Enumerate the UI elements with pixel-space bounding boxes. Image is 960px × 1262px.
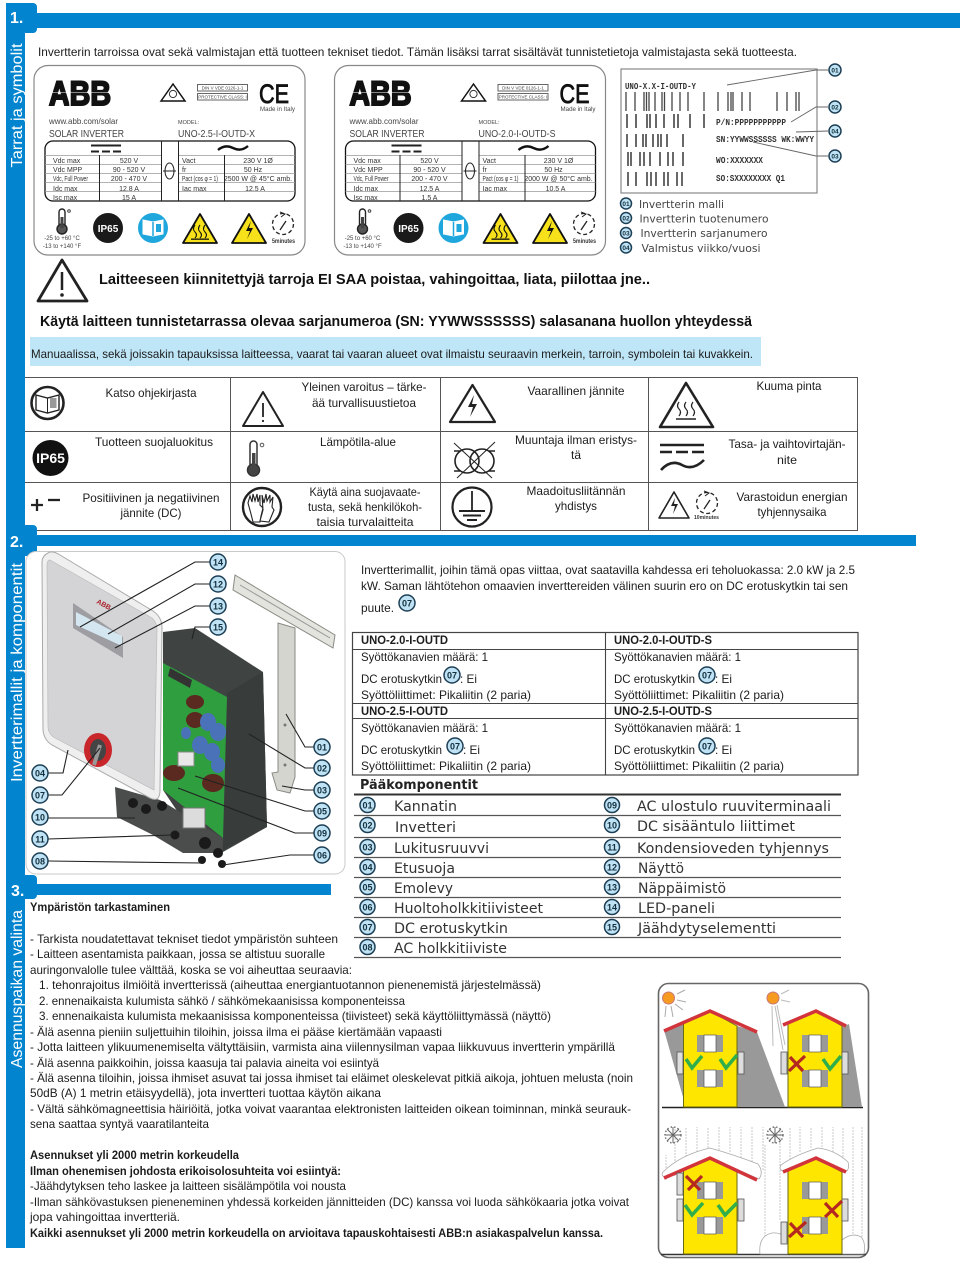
panel: product label UNO-2.5: SOLAR INVERTER: [49, 128, 124, 140]
icon: transformer without isolation: [454, 442, 495, 478]
text: environment check: 2. ennenaikaista kulumista sähkö / sähkömekaanisissa komponenteissa: [39, 994, 405, 1008]
text: installations above 2000 m: [29, 1148, 630, 1240]
icon: plus and minus: [31, 499, 60, 511]
panel: serial number label: [621, 64, 841, 193]
panel: main components list: 03: [362, 842, 373, 852]
panel: main components list: 13: [607, 882, 617, 892]
legend: serial label items: Invertterin sarjanumero: [640, 227, 768, 240]
model UNO-2.5-I-OUTD-S: UNO-2.5-I-OUTD-S: [614, 704, 712, 718]
heading: Pääkomponentit: Pääkomponentit: [360, 777, 479, 793]
panel: product label UNO-2.5: 200 - 470 V: [111, 176, 147, 183]
panel: product label UNO-2.5: Idc max: [53, 186, 78, 193]
panel: product label UNO-2.5: UNO-2.5-I-OUTD-X: [178, 128, 255, 140]
text: environment check: - Vältä sähkömagneettisia häiriöitä, jotka voivat vaarantaa elektronisten laitteiden oikean toiminnan, minkä seurauk-: [30, 1102, 631, 1116]
panel: symbol table: Yleinen varoitus – tärke-: [302, 380, 426, 394]
legend: serial label items: [620, 198, 769, 255]
text: environment check: - Tarkista noudatettavat tekniset tiedot ympäristön suhteen: [30, 932, 338, 946]
text: inverter models intro: Invertterimallit, joihin tämä opas viittaa, ovat saatavilla kahdessa eri teholuokassa: 2.0 kW ja 2.5: [361, 563, 855, 577]
panel: product label UNO-2.5: fr: [182, 167, 187, 174]
text: installations above 2000 m: jopa vahingoittaa invertteriä.: [29, 1210, 180, 1224]
component number markers: 15: [213, 622, 223, 632]
component number markers: 07: [35, 790, 45, 800]
house: snow, partly covered: [662, 1127, 763, 1254]
section 2 header: 2.: [10, 534, 23, 551]
panel: product label UNO-2.5: Vact: [182, 158, 196, 165]
panel: serial number label: 04: [831, 128, 839, 136]
model UNO-2.5-I-OUTD: : Ei: [463, 743, 480, 757]
panel: product label UNO-2.0: 50 Hz: [544, 167, 563, 174]
panel: product label UNO-2.5: 5minutes: [272, 239, 296, 245]
panel: main components list: 14: [607, 902, 617, 912]
component number markers: 09: [317, 828, 327, 838]
notice: serial number as password: Käytä laitteen tunnistetarrassa olevaa sarjanumeroa (SN: YYWWSSSSSS) salasanana huollon yhteydessä: [40, 313, 753, 330]
panel: symbol table: Tasa- ja vaihtovirtajän-: [728, 437, 846, 451]
model UNO-2.5-I-OUTD: UNO-2.5-I-OUTD: [361, 704, 448, 718]
panel: product label UNO-2.0: IP65: [398, 224, 419, 235]
text: environment check: 50dB (A) 1 metrin etäisyydellä), jota invertteri tuottaa käytön aikana: [30, 1086, 381, 1100]
panel: product label UNO-2.5: 12.5 A: [245, 186, 265, 193]
sidebar title: Invertterimallit ja komponentit: Invertterimallit ja komponentit: [9, 562, 26, 782]
model UNO-2.5-I-OUTD: Syöttöliittimet: Pikaliitin (2 paria): [361, 759, 531, 773]
component number markers: 14: [213, 558, 223, 568]
model UNO-2.0-I-OUTD-S: Syöttöliittimet: Pikaliitin (2 paria): [614, 688, 784, 702]
model UNO-2.0-I-OUTD: UNO-2.0-I-OUTD: [361, 633, 448, 647]
model UNO-2.5-I-OUTD: 07: [450, 742, 460, 752]
model UNO-2.0-I-OUTD-S: UNO-2.0-I-OUTD-S: [614, 633, 712, 647]
icon: hot surface: [660, 383, 713, 427]
component number markers: 12: [213, 580, 223, 590]
model UNO-2.5-I-OUTD: [361, 704, 531, 773]
icon: IP65: IP65: [36, 450, 65, 466]
model UNO-2.0-I-OUTD: DC erotuskytkin: [361, 672, 442, 686]
panel: product label UNO-2.0: Vdc max: [354, 158, 381, 165]
panel: main components list: 07: [362, 922, 373, 932]
legend: serial label items: 03: [622, 230, 630, 238]
icon: protective gloves: [243, 488, 281, 526]
model UNO-2.0-I-OUTD: 07: [447, 670, 457, 680]
section 1 header: [6, 3, 960, 33]
panel: product label UNO-2.5: Iac max: [182, 186, 207, 193]
panel: product label UNO-2.5: Made in Italy: [260, 107, 295, 113]
panel: product label UNO-2.5: 12.8 A: [119, 186, 139, 193]
panel: main components list: [354, 777, 841, 958]
text: environment check: Ympäristön tarkastaminen: [30, 900, 170, 914]
panel: product label UNO-2.0: CE: [560, 79, 590, 109]
legend: serial label items: 02: [622, 216, 630, 222]
panel: product label UNO-2.0: Idc max: [354, 186, 379, 193]
panel: product label UNO-2.5: 90 - 520 V: [113, 167, 145, 174]
panel: product label UNO-2.0: 10.5 A: [546, 186, 566, 193]
component number markers: 03: [317, 786, 327, 796]
text: inverter models intro: 07: [402, 598, 412, 608]
panel: main components list: Jäähdytyselementti: [637, 921, 776, 937]
panel: serial number label: 02: [831, 104, 839, 112]
legend: serial label items: Invertterin malli: [639, 198, 724, 211]
model UNO-2.5-I-OUTD-S: 07: [702, 742, 712, 752]
panel: serial number label: 03: [831, 154, 839, 160]
ABB logo: ABB: [49, 75, 111, 113]
text: environment check: [30, 900, 633, 1131]
icon: DC and AC: [660, 445, 704, 470]
panel: product label UNO-2.5: 2500 W @ 45°C amb.: [224, 175, 292, 183]
model UNO-2.5-I-OUTD: DC erotuskytkin: [361, 743, 442, 757]
component number markers: 05: [317, 806, 327, 816]
panel: main components list: 01: [362, 800, 373, 810]
panel: product label UNO-2.0: 230 V 1Ø: [544, 158, 574, 165]
model UNO-2.5-I-OUTD-S: DC erotuskytkin: [614, 743, 695, 757]
model UNO-2.0-I-OUTD: : Ei: [460, 672, 477, 686]
model UNO-2.0-I-OUTD-S: 07: [702, 670, 712, 680]
sidebar title: Tarrat ja symbolit: Tarrat ja symbolit: [9, 43, 26, 168]
panel: product label UNO-2.0: Vact: [482, 158, 496, 165]
panel: installation location houses: [658, 984, 868, 1258]
house: sun, fully shaded: [662, 990, 785, 1107]
legend: serial label items: Invertterin tuotenumero: [640, 212, 769, 226]
panel: main components list: Huoltoholkkitiivisteet: [394, 901, 544, 917]
text: environment check: - Älä asenna paikkoihin, joissa kaasuja tai palavia aineita voi esiintyä: [30, 1056, 379, 1070]
panel: serial number label: P/N:PPPPPPPPPPP: [716, 118, 787, 128]
panel: product label UNO-2.5: -25 to +60 °C: [44, 236, 80, 242]
sidebar: blue vertical strip: [6, 3, 25, 1248]
warning: do not remove labels: Laitteeseen kiinnitettyjä tarroja EI SAA poistaa, vahingoittaa, liata, piilottaa jne..: [99, 271, 650, 288]
panel: symbol table: Vaarallinen jännite: [528, 384, 625, 398]
panel: product label UNO-2.0: 12.5 A: [420, 186, 440, 193]
panel: product label UNO-2.5: Pact (cos φ = 1): [182, 176, 218, 183]
panel: product label UNO-2.0: 1.5 A: [422, 195, 438, 202]
model UNO-2.5-I-OUTD-S: [614, 704, 784, 773]
panel: symbol table: Positiivinen ja negatiivinen: [82, 491, 220, 505]
text: environment check: sena saattaa syntyä vaaratilanteita: [30, 1117, 209, 1131]
text: environment check: - Jotta laitteen ylikuumenemiselta vältyttäisiin, varmista aina viilennysilman vapaa liikkuvuus invertterin ympärillä: [30, 1040, 615, 1054]
bracket: [233, 575, 335, 793]
panel: product label UNO-2.0: DIN V VDE 0126-1-1: [502, 86, 544, 90]
panel: product label UNO-2.5: Vdc, Full Power: [53, 176, 88, 183]
panel: main components list: 08: [362, 942, 373, 952]
panel: product label UNO-2.0: 5minutes: [573, 239, 597, 245]
panel: product label UNO-2.5: MODEL:: [178, 120, 200, 126]
panel: product label UNO-2.0: 2000 W @ 50°C amb.: [524, 175, 593, 183]
section 3 header: 3.: [11, 883, 24, 900]
panel: symbol table: tä: [571, 448, 581, 462]
component number markers: 04: [35, 768, 45, 778]
model UNO-2.0-I-OUTD-S: : Ei: [715, 672, 732, 686]
panel: product label UNO-2.0: Made in Italy: [560, 107, 596, 113]
section 2 header: [6, 525, 916, 556]
panel: serial number label: 01: [831, 68, 839, 74]
panel: product label UNO-2.5: www.abb.com/solar: [48, 117, 118, 126]
panel: product label UNO-2.5: IP65: [98, 224, 119, 235]
model UNO-2.5-I-OUTD-S: : Ei: [715, 743, 732, 757]
component number markers: 13: [213, 602, 223, 612]
panel: main components list: 12: [607, 862, 617, 872]
panel: main components list: 02: [362, 820, 373, 830]
panel: main components list: Emolevy: [394, 881, 453, 897]
panel: main components list: 15: [607, 922, 617, 932]
panel: main components list: Etusuoja: [394, 861, 455, 877]
panel: product label UNO-2.5: Isc max: [53, 195, 78, 202]
text: environment check: - Älä asenna tiloihin, joissa ihmiset asuvat tai jossa ihmiset tai eläimet oleskelevat pitkiä aikoja, johtuen melusta (noin: [30, 1071, 633, 1085]
model UNO-2.5-I-OUTD-S: Syöttöliittimet: Pikaliitin (2 paria): [614, 759, 784, 773]
text: environment check: 1. tehonrajoitus ilmiöitä invertterissä (aiheuttaa energiantuotannon pienenemistä järjestelmässä): [39, 978, 541, 992]
panel: product label UNO-2.0: UNO-2.0-I-OUTD-S: [478, 128, 556, 140]
panel: product label UNO-2.5: PROTECTIVE CLASS: I: [198, 94, 247, 100]
panel: product label UNO-2.5: [34, 66, 305, 255]
panel: product label UNO-2.0: 90 - 520 V: [413, 167, 446, 174]
icon: IP65: [32, 440, 68, 476]
panel: product label UNO-2.0: -13 to +140 °F: [343, 244, 382, 250]
panel: product label UNO-2.0: fr: [482, 167, 487, 174]
panel: product label UNO-2.5: DIN V VDE 0126-1-1: [202, 86, 244, 90]
legend: serial label items: 01: [622, 201, 630, 208]
panel: symbol table: Varastoidun energian: [736, 490, 848, 504]
panel: product label UNO-2.0: Iac max: [482, 186, 508, 193]
text: inverter models intro: kW. Saman lähtötehon omaavien inverttereiden välinen suurin ero on DC erotuskytkin tai sen: [361, 579, 848, 593]
panel: symbol table: yhdistys: [555, 499, 597, 513]
panel: symbol table: Käytä aina suojavaate-: [310, 485, 420, 499]
panel: symbol table: nite: [777, 453, 797, 467]
text: environment check: auringonvalolle tulee välttää, koska se voi aiheuttaa seuraavia:: [30, 963, 352, 977]
text: installations above 2000 m: Kaikki asennukset yli 2000 metrin korkeudella on arvioitava tapauskohtaisesti ABB:n asiakaspalvelun kanssa.: [30, 1226, 603, 1240]
panel: symbol table: jännite (DC): [120, 506, 182, 520]
panel: main components list: Näyttö: [638, 861, 684, 877]
panel: product label UNO-2.0: [334, 66, 606, 255]
panel: serial number label: WO:XXXXXXX: [716, 156, 764, 166]
panel: serial number label: SN:YYWWSSSSSS WK:WWYY: [716, 135, 815, 145]
component number markers: 11: [35, 834, 45, 844]
text: environment check: - Laitteen asentamista paikkaan, jossa se altistuu suoralle: [30, 947, 325, 961]
callout: manual symbols band: Manuaalissa, sekä joissakin tapauksissa laitteessa, vaarat tai vaaran alueet ovat ilmaistu seuraavin merkein, tarroin, symbolein tai kuvakkein.: [31, 347, 753, 361]
panel: symbol table: Lämpötila-alue: [320, 435, 396, 449]
model UNO-2.0-I-OUTD: [361, 633, 531, 702]
text: inverter models intro: [361, 563, 855, 615]
intro text: Invertterin tarroissa ovat sekä valmistajan että tuotteen tekniset tiedot. Tämän lisäksi tarrat sisältävät tunnistetietoja valmistajasta sekä tuotteesta.: [38, 45, 797, 59]
panel: serial number label: UNO-X.X-I-OUTD-Y: [625, 82, 696, 92]
model UNO-2.0-I-OUTD-S: DC erotuskytkin: [614, 672, 695, 686]
model UNO-2.5-I-OUTD: Syöttökanavien määrä: 1: [361, 721, 488, 735]
text: installations above 2000 m: Ilman ohenemisen johdosta erikoisolosuhteita voi esiintyä:: [30, 1164, 341, 1178]
panel: main components list: 05: [362, 882, 373, 892]
panel: product label UNO-2.0: SOLAR INVERTER: [350, 128, 425, 140]
model UNO-2.0-I-OUTD: Syöttöliittimet: Pikaliitin (2 paria): [361, 688, 531, 702]
panel: product label UNO-2.0: Vdc, Full Power: [354, 176, 389, 183]
panel: main components list: Näppäimistö: [638, 881, 726, 897]
panel: main components list: 09: [607, 800, 617, 810]
panel: product label UNO-2.5: CE: [259, 79, 289, 109]
icon: dangerous voltage: [450, 385, 495, 422]
panel: inverter exploded diagram: [26, 552, 345, 874]
text: environment check: 3. ennenaikaista kulumista mekaanisissa komponenteissa (tiivisteet) sekä käyttöliittymässä (näyttö): [39, 1009, 551, 1023]
panel: product label UNO-2.5: -13 to +140 °F: [43, 244, 81, 250]
panel: product label UNO-2.0: 520 V: [420, 158, 439, 165]
panel: main components list: 04: [362, 862, 373, 872]
icon: warning triangle: [38, 260, 87, 301]
callout lines: [48, 562, 314, 865]
inverter front cover: ABB: [95, 599, 112, 612]
panel: main components list: Kondensioveden tyhjennys: [637, 841, 829, 857]
component number markers: 08: [35, 856, 45, 866]
panel: main components list: AC ulostulo ruuviterminaali: [637, 799, 831, 815]
panel: main components list: 11: [607, 842, 617, 852]
panel: product label UNO-2.0: -25 to +60 °C: [345, 236, 381, 242]
section 3 header: [6, 875, 331, 900]
panel: product label UNO-2.0: Pact (cos φ = 1): [482, 176, 518, 183]
panel: main components list: DC sisääntulo liittimet: [637, 819, 796, 835]
house: sun, partly exposed: [767, 990, 862, 1107]
icon: manual book: [32, 387, 64, 419]
panel: main components list: Lukitusruuvvi: [394, 841, 489, 857]
panel: symbol table: Tuotteen suojaluokitus: [95, 435, 213, 449]
panel: main components list: AC holkkitiiviste: [394, 941, 507, 957]
component number markers: 02: [317, 764, 327, 774]
panel: product label UNO-2.0: 200 - 470 V: [411, 176, 448, 183]
component number markers: 10: [35, 812, 45, 822]
house: snow, exposed: [760, 1127, 865, 1254]
component number markers: 01: [317, 742, 327, 752]
model UNO-2.5-I-OUTD-S: Syöttökanavien määrä: 1: [614, 721, 741, 735]
icon: stored energy discharge: 10minutes: [694, 515, 719, 521]
panel: symbol table: Maadoitusliitännän: [526, 484, 626, 498]
panel: main components list: 10: [607, 820, 617, 830]
panel: main components list: Invetteri: [395, 820, 456, 836]
panel: product label UNO-2.5: Vdc MPP: [53, 167, 83, 174]
panel: product label UNO-2.0: PROTECTIVE CLASS: I: [499, 94, 547, 100]
panel: product label UNO-2.5: 15 A: [122, 195, 136, 202]
panel: product label UNO-2.0: MODEL:: [478, 120, 500, 126]
model UNO-2.0-I-OUTD-S: Syöttökanavien määrä: 1: [614, 650, 741, 664]
icon: earth connection: [452, 488, 492, 526]
panel: product label UNO-2.5: 50 Hz: [244, 167, 263, 174]
panel: product label UNO-2.0: Isc max: [354, 195, 378, 202]
model UNO-2.0-I-OUTD-S: [614, 633, 784, 702]
panel: main components list: Kannatin: [394, 799, 457, 815]
model UNO-2.0-I-OUTD: Syöttökanavien määrä: 1: [361, 650, 488, 664]
icon: temperature: [248, 441, 264, 476]
inverter front cover: [42, 552, 162, 799]
panel: main components list: DC erotuskytkin: [394, 921, 508, 937]
panel: symbol table: taisia turvalaitteita: [316, 515, 414, 529]
text: installations above 2000 m: -Jäähdytyksen teho laskee ja laitteen sisälämpötila voi nousta: [30, 1179, 346, 1193]
ABB logo: ABB: [350, 75, 412, 113]
panel: product label UNO-2.5: Vdc max: [53, 158, 81, 165]
table: inverter models: [352, 632, 858, 775]
panel: product label UNO-2.0: Vdc MPP: [354, 167, 383, 174]
sidebar title: Asennuspaikan valinta: Asennuspaikan valinta: [9, 910, 26, 1068]
component number markers: [32, 554, 330, 869]
callout: manual symbols band: [30, 337, 761, 366]
panel: symbol table: Muuntaja ilman eristys-: [515, 433, 637, 447]
panel: product label UNO-2.0: www.abb.com/solar: [349, 117, 419, 126]
panel: main components list: 06: [362, 902, 373, 912]
panel: product label UNO-2.5: 230 V 1Ø: [243, 158, 273, 165]
section 1 header: 1.: [10, 10, 23, 27]
legend: serial label items: Valmistus viikko/vuosi: [642, 242, 760, 255]
panel: main components list: LED-paneli: [638, 901, 715, 917]
text: environment check: - Älä asenna pieniin suljettuihin tiloihin, joissa ilma ei pääse kiertämään vapaasti: [30, 1025, 442, 1039]
component number markers: 06: [317, 850, 327, 860]
panel: symbol table: Katso ohjekirjasta: [106, 386, 197, 400]
panel: serial number label: SO:SXXXXXXXX Q1: [716, 174, 786, 184]
inverter body: [115, 628, 267, 868]
panel: symbol table: [25, 377, 858, 531]
panel: product label UNO-2.5: 520 V: [120, 158, 138, 165]
text: installations above 2000 m: Asennukset yli 2000 metrin korkeudella: [30, 1148, 239, 1162]
panel: symbol table: Kuuma pinta: [756, 379, 822, 393]
icon: general warning: [243, 392, 283, 426]
icon: stored energy discharge: [659, 491, 719, 521]
panel: symbol table: ää turvallisuustietoa: [312, 396, 416, 410]
legend: serial label items: 04: [622, 245, 630, 252]
panel: symbol table: tusta, sekä henkilökoh-: [308, 500, 422, 514]
text: installations above 2000 m: -Ilman sähkövastuksen pieneneminen yhdessä korkeiden jännitteiden (DC) kanssa voi luoda sähkökaaria jotka voivat: [30, 1195, 630, 1209]
text: inverter models intro: puute.: [361, 601, 394, 615]
panel: symbol table: tyhjennysaika: [758, 505, 827, 519]
